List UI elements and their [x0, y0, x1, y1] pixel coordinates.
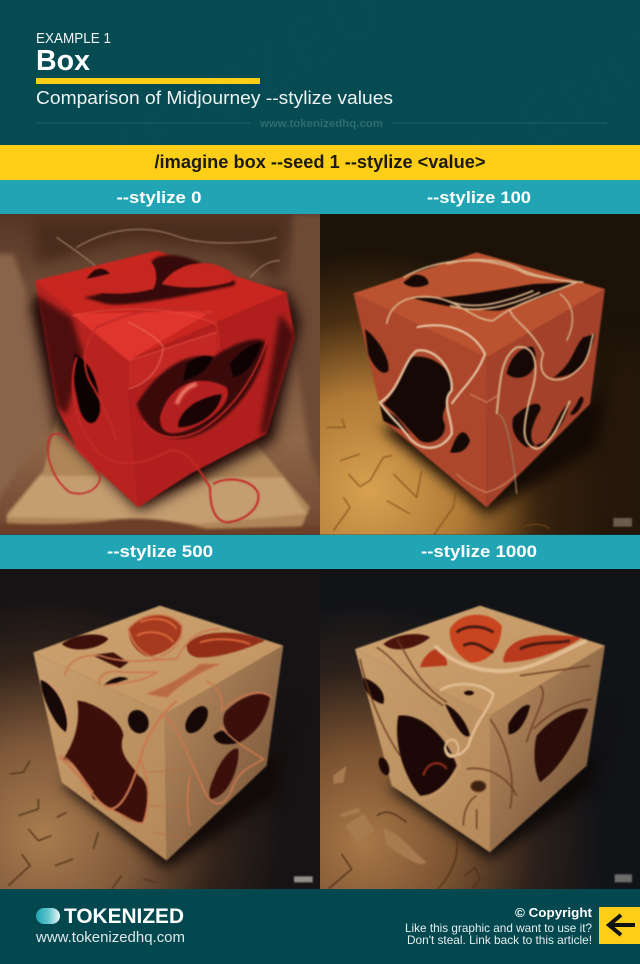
copyright note [405, 905, 593, 947]
copyright note: Like this graphic and want to use it? [405, 921, 592, 935]
label row: stylize 0 and 100: --stylize 0 [116, 188, 202, 207]
image: box at stylize 0 [0, 204, 330, 547]
copyright note: © Copyright [515, 905, 593, 920]
cube faces [35, 251, 295, 507]
cube faces [33, 606, 283, 861]
cube faces [355, 606, 605, 852]
top red openings [420, 615, 582, 776]
floor cracks [327, 419, 550, 536]
image: box at stylize 1000 [310, 559, 640, 902]
cream ribbons [380, 260, 593, 494]
left face hole [74, 354, 100, 423]
copyright note: Don't steal. Link back to this article! [407, 933, 592, 947]
title underline [36, 78, 260, 84]
logo mark [36, 908, 60, 924]
label row: stylize 500 and 1000: --stylize 1000 [421, 542, 537, 561]
signature stamp [294, 876, 313, 882]
raised cream bands [360, 639, 592, 829]
footer panel [0, 889, 640, 964]
floor shapes [328, 766, 480, 891]
red ribbons [48, 308, 267, 522]
icon: back arrow [599, 907, 640, 944]
image: box at stylize 100 [310, 204, 640, 547]
top red openings [128, 615, 265, 658]
eyebrow: example number: EXAMPLE 1 [36, 31, 111, 47]
holes [62, 634, 270, 823]
label row: stylize 500 and 1000 [0, 535, 640, 569]
top slots and swirl [60, 255, 235, 305]
floor cracks [8, 761, 157, 889]
logo [36, 905, 184, 928]
prompt banner [0, 145, 640, 180]
signature stamp [615, 874, 632, 882]
image: box at stylize 500 [0, 559, 330, 902]
footer website: www.tokenizedhq.com [35, 929, 185, 946]
holes [365, 275, 595, 453]
cube faces [353, 252, 605, 507]
holes [363, 634, 588, 796]
subtitle: Comparison of Midjourney --stylize values [36, 88, 393, 108]
website divider: www.tokenizedhq.com [259, 118, 383, 130]
label row: stylize 0 and 100 [0, 180, 640, 214]
header panel [0, 0, 640, 262]
signature stamp [613, 518, 632, 527]
title: Box [36, 45, 90, 77]
copper ribbons [41, 615, 272, 839]
logo wordmark: TOKENIZED [64, 905, 184, 928]
label row: stylize 0 and 100: --stylize 100 [427, 188, 531, 207]
label row: stylize 500 and 1000: --stylize 500 [107, 542, 213, 561]
prompt banner: /imagine box --seed 1 --stylize <value> [154, 152, 486, 172]
right face heart hole [137, 339, 267, 439]
